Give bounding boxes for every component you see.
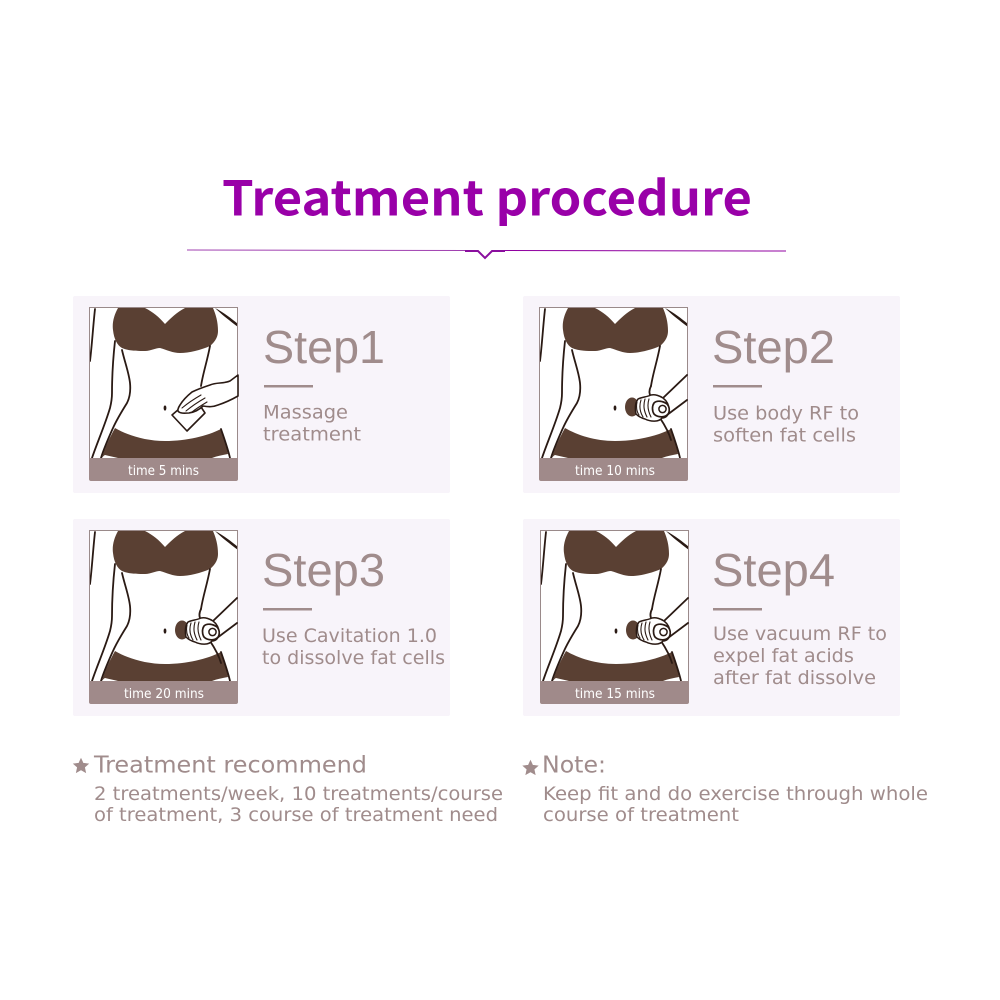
step description: treatment bbox=[263, 424, 361, 446]
note text: Keep fit and do exercise through whole bbox=[543, 783, 928, 805]
step description: after fat dissolve bbox=[713, 667, 876, 689]
illustration: cavitation device bbox=[89, 530, 238, 704]
recommendation heading: Treatment recommend bbox=[93, 752, 367, 778]
note heading: Note: bbox=[542, 752, 606, 778]
illustration: hand applying pad bbox=[89, 307, 238, 481]
step description: to dissolve fat cells bbox=[262, 647, 445, 669]
time label: time 10 mins bbox=[575, 464, 655, 479]
icon: star bbox=[74, 758, 88, 772]
time label: time 20 mins bbox=[124, 687, 204, 702]
step heading: Step2 bbox=[712, 321, 835, 373]
illustration: vacuum RF device bbox=[540, 530, 689, 704]
step heading: Step1 bbox=[263, 321, 385, 373]
step description: Use Cavitation 1.0 bbox=[262, 625, 437, 647]
title divider with chevron bbox=[187, 250, 786, 258]
recommendation block bbox=[74, 752, 503, 826]
step description bbox=[713, 623, 887, 689]
step description: Use vacuum RF to bbox=[713, 623, 887, 645]
panel: step 2 bbox=[523, 296, 900, 493]
step description: Use body RF to bbox=[713, 402, 859, 424]
step description: expel fat acids bbox=[713, 645, 854, 667]
recommendation text: 2 treatments/week, 10 treatments/course bbox=[94, 783, 503, 805]
recommendation text bbox=[94, 783, 503, 826]
note text bbox=[543, 783, 928, 826]
step heading: Step4 bbox=[712, 544, 835, 596]
step description bbox=[262, 625, 445, 669]
panel: step 4 bbox=[523, 519, 900, 716]
note text: course of treatment bbox=[543, 804, 739, 826]
note block bbox=[523, 752, 928, 826]
time label: time 5 mins bbox=[128, 464, 199, 479]
step description: soften fat cells bbox=[713, 424, 856, 446]
step description bbox=[263, 402, 361, 446]
panel: step 3 bbox=[73, 519, 450, 716]
icon: star bbox=[523, 760, 538, 774]
recommendation text: of treatment, 3 course of treatment need bbox=[94, 804, 498, 826]
illustration: body RF device bbox=[539, 307, 688, 481]
title: Treatment procedure bbox=[222, 160, 752, 230]
step heading: Step3 bbox=[262, 544, 385, 596]
step description bbox=[713, 402, 859, 446]
panel: step 1 bbox=[73, 296, 450, 493]
time label: time 15 mins bbox=[575, 687, 655, 702]
step description: Massage bbox=[263, 402, 348, 424]
